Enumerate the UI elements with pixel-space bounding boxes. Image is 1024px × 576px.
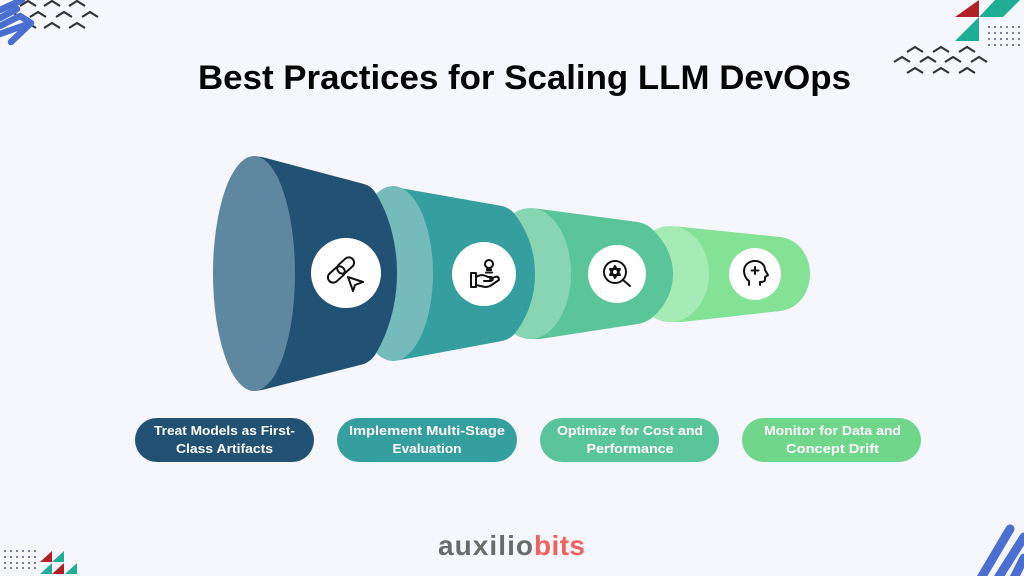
pill: Optimize for Cost and Performance [540,418,719,462]
pill: Implement Multi-Stage Evaluation: Evaluation [392,441,462,456]
pill: Monitor for Data and Concept Drift: Concept Drift [786,441,880,456]
decoration: top-right chevrons [894,47,987,73]
icon circle 1 [311,238,381,308]
segment 1 [213,156,397,391]
pill: Optimize for Cost and Performance: Performance [586,441,674,456]
icon circle 4 [729,248,781,300]
logo: auxiliobits [438,530,585,561]
title: Best Practices for Scaling LLM DevOps [198,59,851,97]
segment 4 [631,226,810,322]
icon circle 2 [452,242,516,306]
icon: chain link and cursor [325,255,363,291]
decoration: top-left chevrons [4,1,98,28]
segment 2 [353,186,535,361]
logo: auxiliobits: bits [534,530,585,561]
decoration: top-right dots [988,26,1020,46]
icon: magnifier with gear [604,261,630,286]
pill: Treat Models as First-Class Artifacts: Class Artifacts [176,441,273,456]
decoration: top-left blue scribble [0,0,31,42]
pill: Monitor for Data and Concept Drift: Monitor for Data and [764,423,901,438]
decoration: top-right triangles [955,0,1020,41]
segment 3 [489,208,673,339]
pill: Implement Multi-Stage Evaluation: Implement Multi-Stage [349,423,505,438]
pill: Treat Models as First-Class Artifacts [135,418,314,462]
icon circle 3 [588,245,646,303]
logo: auxiliobits: auxilio [438,530,533,561]
funnel diagram [213,156,810,391]
pill: Treat Models as First-Class Artifacts: Treat Models as First- [154,423,295,438]
decoration: bottom-right blue strokes [981,529,1024,576]
icon: head with plus [744,261,768,285]
pill: Monitor for Data and Concept Drift [742,418,921,462]
pill: Implement Multi-Stage Evaluation [337,418,517,462]
decoration: bottom-left triangles [40,551,77,574]
icon: hand with light bulb [471,260,499,287]
pill: Optimize for Cost and Performance: Optimize for Cost and [557,423,703,438]
decoration: bottom-left dots [4,550,36,569]
